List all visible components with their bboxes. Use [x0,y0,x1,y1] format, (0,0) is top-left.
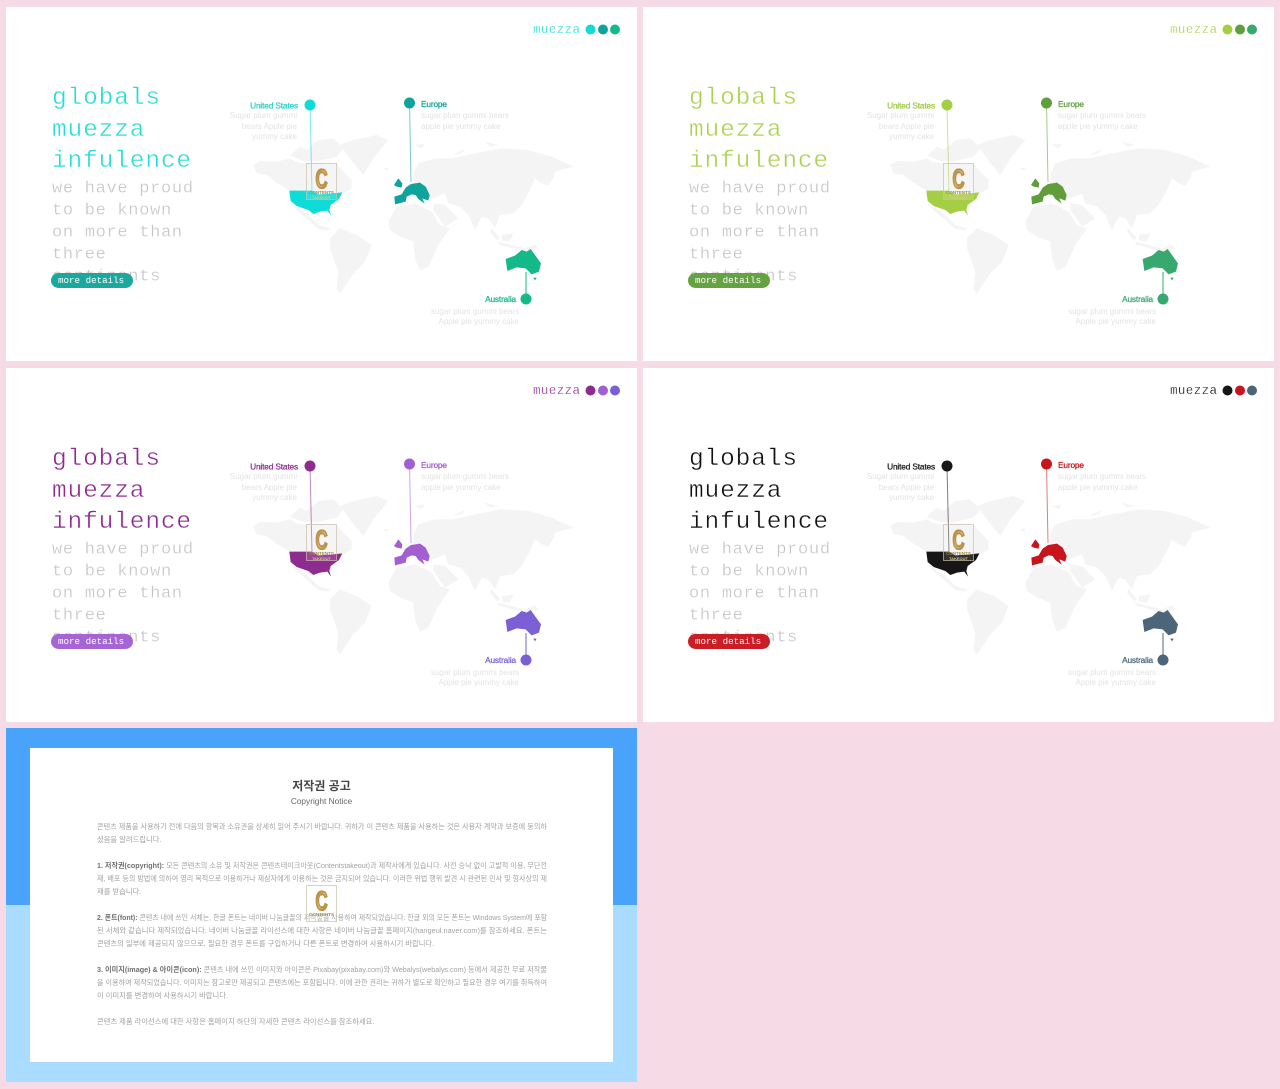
panel: copyright notice [6,728,637,1082]
title: muezza [689,117,782,144]
marker: Europe: apple pie yummy cake [1058,122,1138,131]
marker: United States: bears Apple pie [879,483,935,492]
marker: Australia: sugar plum gummi bears [1068,307,1156,316]
body text: to be known [689,202,809,220]
marker: Australia: sugar plum gummi bears [431,668,519,677]
title: muezza [52,478,145,505]
notice section 3: image and icon: 이 이미지를 변경하여 사용하시기 바랍니다. [97,991,228,1000]
marker: Europe: apple pie yummy cake [1058,483,1138,492]
marker: United States: United States [887,100,935,110]
marker: United States: Sugar plum gummi [867,111,934,120]
body text: we have proud [689,180,831,198]
logo watermark [306,164,336,200]
panel: teal slide [6,7,637,361]
brand name and colour dots: muezza [1170,23,1218,37]
title: infulence [52,148,192,175]
marker: United States [867,460,952,553]
body text: continents [52,268,161,286]
panel: black and red slide [643,368,1274,722]
logo watermark: CONTENTS [946,190,971,195]
logo watermark: C [952,525,965,555]
body text: to be known [52,562,172,582]
marker: Australia [431,272,532,326]
title: muezza [689,478,782,505]
marker: United States [230,460,316,553]
notice closing line: 콘텐츠 제품 라이선스에 대한 사항은 홈페이지 하단의 자세한 콘텐츠 라이선스를 참조하세요. [97,1017,374,1026]
logo watermark [944,524,974,561]
button: more details [695,275,761,286]
title: globals [52,85,161,112]
body text: three [689,246,744,264]
body text: we have proud [52,180,194,198]
marker: United States: bears Apple pie [242,122,298,131]
marker: Australia [1068,272,1168,326]
brand name and colour dots [533,23,620,37]
marker: Australia [1068,633,1168,687]
body text: continents [689,268,798,286]
notice section 2: font: 된 서체와 같습니다 제작되었습니다. 네이버 나눔글꼴 라이선스에 대한 사항은 네이버 나눔글꼴 홈페이지(hangeul.naver.com)를 참조하세요. 폰트는 [97,926,547,935]
marker: United States: Sugar plum gummi [230,111,297,120]
body text: to be known [52,202,172,220]
body text: on more than [689,584,820,604]
marker: United States: bears Apple pie [879,122,935,131]
marker: Europe: Europe [421,99,447,109]
logo watermark: TAKEOUT [312,556,332,561]
title: globals [52,446,161,473]
marker: Australia: Australia [1122,294,1154,304]
marker: Australia: Australia [1122,655,1154,665]
marker: United States [230,100,316,192]
notice section 2: font: 콘텐츠의 일부에 제공되지 않으므로, 필요한 경우 폰트를 구입하거나 다른 폰트로 변경하여 사용하시기 바랍니다. [97,939,434,948]
brand name and colour dots [1170,23,1257,37]
body text: three [52,246,107,264]
marker: Europe: sugar plum gummi bears [421,111,509,120]
marker: United States [867,100,952,192]
marker: Australia: Australia [485,655,517,665]
brand name and colour dots: muezza [533,384,581,398]
logo watermark [944,164,974,200]
marker: Europe: Europe [1058,460,1084,470]
button [51,634,133,649]
world map [890,496,1210,654]
panel: purple slide [6,368,637,722]
marker: Europe [1041,98,1146,182]
world map [890,135,1210,293]
body text: on more than [689,224,820,242]
marker: Europe [404,458,509,543]
marker: United States: yummy cake [252,493,298,502]
title: globals [689,85,798,112]
logo watermark: CONTENTS [946,551,971,556]
title: muezza [52,117,145,144]
body text: continents [689,628,798,648]
marker: Australia: Apple pie yummy cake [1076,317,1157,326]
marker: Australia: Apple pie yummy cake [439,317,520,326]
logo watermark: CONTENTS [309,190,334,195]
marker: Europe [1041,458,1146,543]
notice section 1: copyright: 재를 받습니다. [97,887,141,896]
world map [253,135,573,293]
title: infulence [689,509,829,536]
notice intro: 셨음을 알려드립니다. [97,835,161,844]
button: more details [695,636,761,647]
logo watermark: C [315,525,328,555]
button [51,273,133,288]
marker: United States: bears Apple pie [242,483,298,492]
marker: United States: United States [250,462,298,472]
notice section 1: copyright: 1. 저작권(copyright): 모든 콘텐츠의 소유 및 저작권은 콘텐츠테이크아웃(Contentstakeout)과 제작사에게 있습니다. 사전 승낙 없이 고발적 이용, 무단전 [97,861,557,870]
logo watermark: TAKEOUT [312,195,332,200]
marker: United States: Sugar plum gummi [867,472,934,481]
logo watermark: C [315,886,328,916]
body text: to be known [689,562,809,582]
logo watermark: TAKEOUT [949,556,969,561]
brand name and colour dots: muezza [1170,384,1218,398]
brand name and colour dots [1170,384,1257,398]
title: infulence [52,509,192,536]
marker: Europe: sugar plum gummi bears [421,472,509,481]
marker: Europe: sugar plum gummi bears [1058,111,1146,120]
logo watermark: TAKEOUT [949,195,969,200]
brand name and colour dots: muezza [533,23,581,37]
notice subheading: Copyright Notice [291,796,353,806]
logo watermark [306,524,336,561]
body text: three [689,606,744,626]
marker: Europe: apple pie yummy cake [421,483,501,492]
title: infulence [689,148,829,175]
body text: three [52,606,107,626]
marker: Europe: sugar plum gummi bears [1058,472,1146,481]
body text: on more than [52,584,183,604]
button [688,634,770,649]
body text: on more than [52,224,183,242]
logo watermark: C [952,164,965,194]
marker: Australia: sugar plum gummi bears [1068,668,1156,677]
brand name and colour dots [533,384,620,398]
marker: United States: yummy cake [889,493,935,502]
logo watermark: CONTENTS [309,551,334,556]
button [688,273,770,288]
marker: United States: yummy cake [889,132,935,141]
marker: Australia: Apple pie yummy cake [439,678,520,687]
notice section 2: font: 2. 폰트(font): 콘텐츠 내에 쓰인 서체는, 한글 폰트는 네이버 나눔글꼴의 저작물을 사용하여 제작되었습니다. 한글 외의 모든 폰트는 Windows System에 포함 [97,913,568,922]
notice section 3: image and icon: 을 이용하여 제작되었습니다. 이미지는 참고로만 제공되고 콘텐츠에는 포함됩니다. 이에 관한 권리는 귀하가 별도로 확인하고 필요한 경우 여기를 취득하여 [97,978,547,987]
world map [253,496,573,654]
title: globals [689,446,798,473]
marker: Australia: Australia [485,294,517,304]
panel: green slide [643,7,1274,361]
notice section 3: image and icon: 3. 이미지(image) & 아이콘(icon): 콘텐츠 내에 쓰인 이미지와 아이콘은 Pixabay(pixabay.com)와 Webalys(webalys.com) 등에서 제공한 무료 저작물 [97,965,551,974]
notice intro: 콘텐츠 제품을 사용하기 전에 다음의 항목과 소유권을 상세히 읽어 주시기 바랍니다. 귀하가 이 콘텐츠 제품을 사용하는 것은 사용자 계약과 보증에 동의하 [97,822,547,831]
logo watermark: CONTENTS [309,912,334,917]
marker: Europe [404,98,509,182]
button: more details [58,275,124,286]
body text: we have proud [52,540,194,560]
logo watermark [306,886,336,922]
marker: United States: yummy cake [252,132,298,141]
marker: Europe: apple pie yummy cake [421,122,501,131]
marker: United States: United States [250,100,298,110]
marker: Australia [431,633,532,687]
button: more details [58,636,124,647]
body text: continents [52,628,161,648]
notice section 1: copyright: 재, 배포 등의 방법에 의하여 영리 목적으로 이용하거나 제삼자에게 이용하는 것은 금지되어 있습니다. 이러한 위법 행위 발견 시 관련된 민사 및 형사상의 제 [97,874,547,883]
marker: United States: Sugar plum gummi [230,472,297,481]
notice heading: 저작권 공고 [292,778,351,793]
logo watermark: C [315,164,328,194]
body text: we have proud [689,540,831,560]
marker: United States: United States [887,462,935,472]
marker: Europe: Europe [421,460,447,470]
marker: Australia: sugar plum gummi bears [431,307,519,316]
marker: Europe: Europe [1058,99,1084,109]
marker: Australia: Apple pie yummy cake [1076,678,1157,687]
